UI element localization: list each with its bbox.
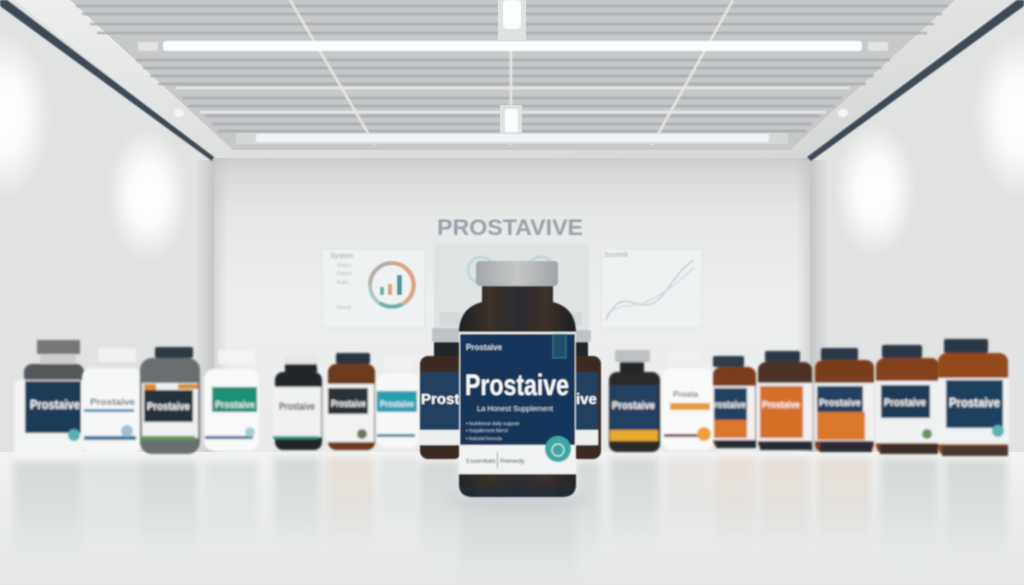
bottle 13: orange panel: [758, 351, 812, 450]
wall panel: center board: [434, 245, 589, 330]
wall panel: line chart summary: Summit: [604, 252, 628, 259]
wall panel: donut chart summary: Result: [337, 305, 352, 311]
label: footer text: Remedy: [500, 458, 525, 465]
room: walls: [0, 0, 1024, 460]
bottle 9: behind main, right: ive: [576, 391, 597, 408]
bottle 6: amber glass white label: [326, 353, 375, 450]
bottle 14: navy and orange panel: [815, 348, 874, 452]
main bottle: [459, 261, 576, 497]
wall panel: donut chart summary: Ratio: [337, 280, 349, 286]
dark wall strip: left: [0, 0, 214, 161]
bottle 16: large right bottle: [938, 339, 1009, 456]
bottle 10: navy panel yellow band: Prostaive: [612, 400, 655, 412]
bottle 3: dark glass green band: Prostaive: [147, 401, 190, 413]
label: bullet list: • Supplement blend: [466, 428, 508, 434]
wall panel: donut chart summary: Report: [337, 271, 353, 277]
bottle 11: white bottle orange band: [662, 351, 714, 450]
bottle 5: dark glass white label: Prostaive: [279, 401, 315, 413]
label: product name: Prostaive: [465, 369, 569, 402]
wall panel: donut chart summary: [322, 249, 425, 328]
main bottle: neck and body glass: [459, 286, 576, 497]
bottle 7: white bottle teal panel: [377, 358, 419, 448]
bottle 2: white bottle blue band: [82, 348, 142, 453]
bottle 15: white label navy panel: Prostaive: [884, 397, 926, 409]
main bottle shadow: [446, 490, 590, 508]
bottle 4: white bottle green panel: [204, 350, 259, 451]
label: bullet list: [466, 421, 520, 442]
dark wall strip: right: [807, 0, 1024, 161]
room: ceiling: [14, 0, 1010, 158]
bottle 11: white bottle orange band: Prosta: [673, 390, 698, 399]
wall panel: donut chart summary: Status: [337, 263, 352, 269]
floor reflections: [14, 458, 1007, 585]
bottle 13: orange panel: Prostaive: [762, 400, 800, 411]
bottle 4: white bottle green panel: Prostaive: [215, 400, 255, 411]
bottle 3: dark glass green band: [140, 347, 200, 454]
bottle 14: navy and orange panel: Prostaive: [819, 398, 861, 409]
main bottle: label: [459, 332, 576, 474]
bottle 10: navy panel yellow band: [609, 350, 660, 452]
bottle 8: behind main, left: Prosta: [421, 391, 468, 408]
bottle 1: white-label navy panel: Prostaive: [30, 397, 80, 412]
label: leaf badge: [553, 334, 566, 358]
bottle 16: large right bottle: Prostaive: [949, 395, 1000, 410]
bottle 5: dark glass white label: [273, 356, 322, 450]
label: small brand: Prostaive: [466, 343, 503, 352]
bottle 1: white-label navy panel: [14, 340, 84, 458]
label: footer text: [466, 458, 525, 465]
main bottle: cap: [476, 261, 558, 286]
bottle 6: amber glass white label: Prostaive: [331, 399, 366, 410]
bottle 12: amber navy orange: rostaive: [714, 400, 746, 411]
main bottle: base tint: [459, 473, 576, 497]
wall heading: PROSTAVIVE: [437, 215, 583, 240]
bottle 12: amber navy orange: [713, 356, 756, 448]
bottle 2: white bottle blue band: Prostaive: [90, 397, 135, 407]
bottle 15: white label navy panel: [875, 345, 941, 454]
label: bullet list: • Nutritional daily support: [466, 421, 520, 427]
bottle 8: behind main, left: [420, 328, 468, 459]
bottle 9: behind main, right: [570, 330, 601, 459]
wall panel: line chart summary: [601, 249, 702, 328]
label: subtitle: La Honest Supplement: [477, 404, 554, 413]
wall panel: donut chart summary: System: [330, 253, 354, 260]
label: bullet list: • Natural formula: [466, 436, 502, 442]
ceiling lights: [138, 0, 888, 142]
floor: [0, 452, 1024, 585]
label: footer text: Essentials: [466, 458, 496, 465]
label: teal seal: [545, 436, 571, 462]
bottle 7: white bottle teal panel: Prostaive: [380, 399, 414, 409]
